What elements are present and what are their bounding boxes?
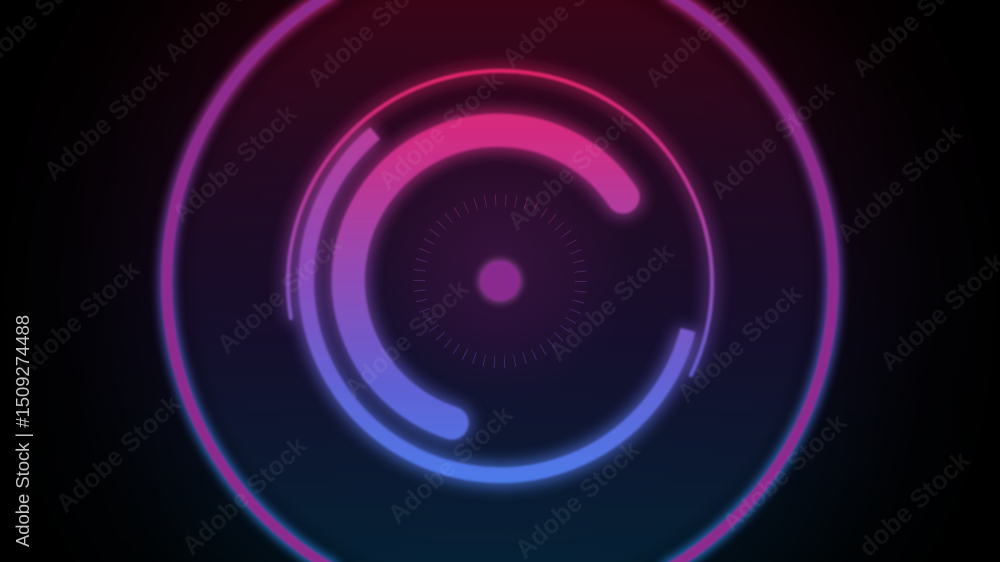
stock watermarks: Adobe Stock: [543, 237, 680, 368]
outer neon ring: [167, 0, 833, 562]
stock watermarks: Adobe Stock: [211, 229, 348, 360]
stock watermarks: Adobe Stock: [50, 388, 187, 519]
tick dial: [419, 200, 581, 362]
stock watermarks: Adobe Stock: [372, 65, 509, 196]
stock watermarks: Adobe Stock: [671, 278, 808, 409]
stock watermarks: Adobe Stock: [501, 106, 638, 237]
stock watermarks: Adobe Stock: [704, 75, 841, 206]
stock watermarks: dobe Stock: [852, 444, 976, 562]
stock watermarks: Adobe Stock: [382, 399, 519, 530]
center dot: [478, 258, 522, 304]
medium arc: [306, 133, 688, 475]
stock watermarks: Adobe Stock: [166, 98, 303, 229]
stock watermarks: Adobe Stock: [38, 56, 175, 187]
stock watermarks: Adobe Stock: [9, 254, 146, 385]
stock watermarks: Adobe Stock: [716, 407, 853, 538]
stock watermarks: Adobe Stock: [338, 273, 475, 404]
thick arc with rounded ends: [348, 130, 623, 423]
vertical stock id label: Adobe Stock | #1509274488: [12, 315, 33, 547]
stock watermarks: Adobe Stock: [176, 430, 313, 561]
thin outer arc: [288, 71, 712, 375]
stock watermarks: Adobe Stock: [509, 434, 646, 562]
stock watermarks: Adobe Stock: [831, 118, 968, 249]
